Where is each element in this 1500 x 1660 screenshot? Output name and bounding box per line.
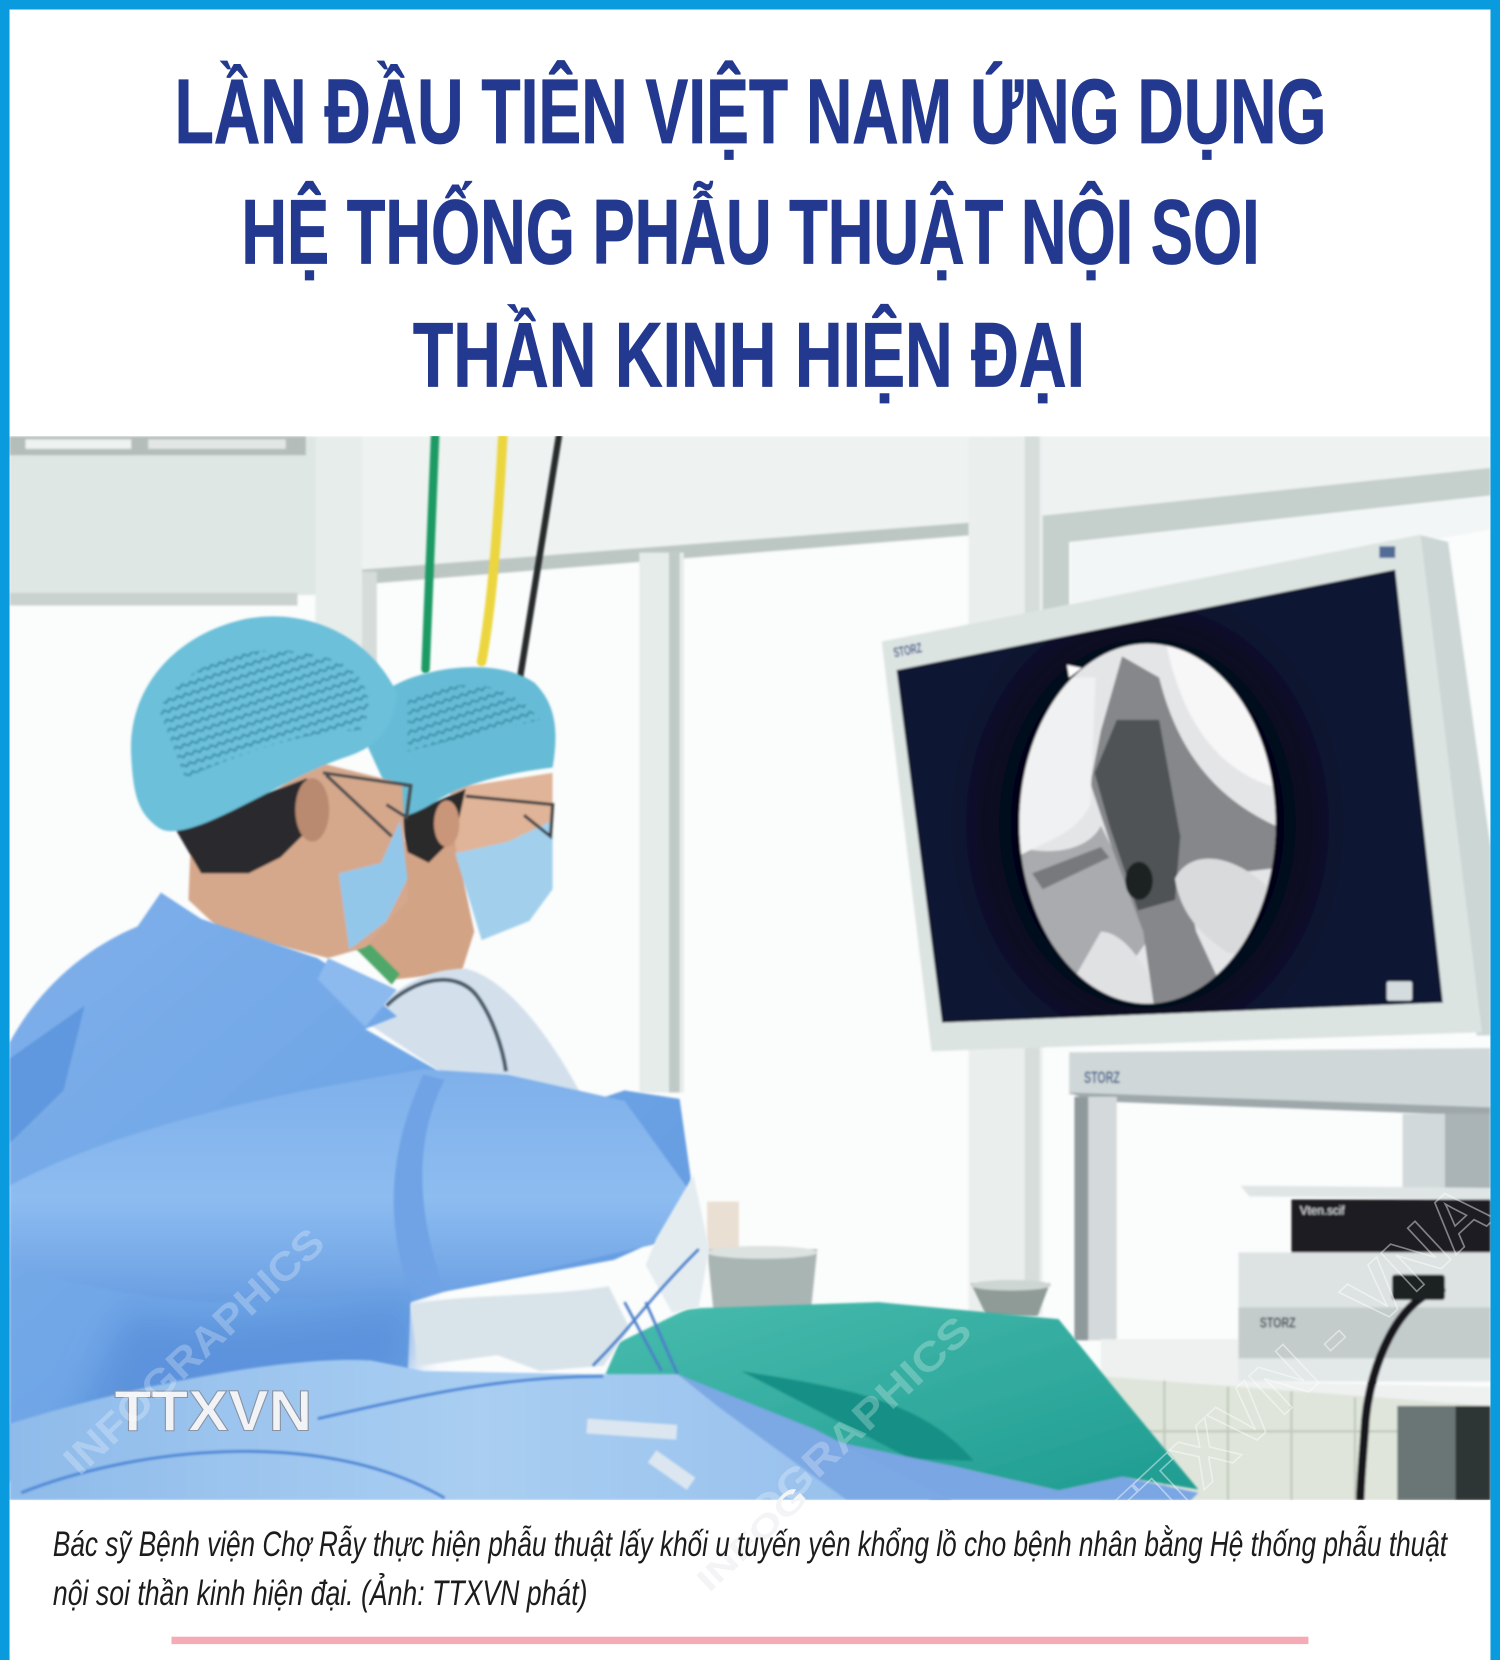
teal surgical drape bbox=[606, 1302, 1198, 1500]
surgical bowls bbox=[707, 1202, 1051, 1316]
patient drape bbox=[10, 1249, 953, 1500]
green scrub collar bbox=[355, 944, 400, 985]
photo caption bbox=[53, 1525, 1448, 1613]
endoscopy monitor bbox=[882, 535, 1490, 1051]
rear surgeon bbox=[355, 667, 555, 985]
TTXVN logo watermark: TTXVN bbox=[114, 1379, 312, 1443]
glasses bbox=[323, 773, 411, 836]
4K badge bbox=[1379, 546, 1395, 558]
surgical gown bbox=[10, 892, 693, 1482]
ear bbox=[295, 778, 329, 842]
hanging cables bbox=[426, 436, 559, 686]
plastic wrap bbox=[365, 969, 580, 1093]
TTXVN VNA watermark right: TTXVN - VNA bbox=[1086, 1167, 1500, 1569]
endoscopic view bbox=[1016, 635, 1281, 1006]
surgical mask bbox=[339, 820, 408, 950]
infographics watermark left: INFOGRAPHICS bbox=[55, 1219, 333, 1483]
device label: Vten.scif bbox=[1300, 1204, 1345, 1217]
caption line 2: nội soi thần kinh hiện đại. (Ảnh: TTXVN phát) bbox=[53, 1573, 588, 1613]
title bbox=[175, 59, 1326, 406]
neck and face bbox=[188, 762, 408, 958]
face bbox=[450, 773, 553, 863]
surgeon gloves bbox=[411, 1175, 709, 1371]
front surgeon head bbox=[131, 616, 411, 958]
infographics watermark center: INFOGRAPHICS bbox=[683, 1307, 980, 1589]
hair cap bbox=[131, 616, 397, 831]
photo: surgeons and endoscopy monitor bbox=[10, 436, 1500, 1589]
cart brand: STORZ bbox=[1084, 1068, 1120, 1087]
title line 3: THẦN KINH HIỆN ĐẠI bbox=[413, 303, 1085, 406]
glasses bbox=[466, 796, 553, 836]
equipment cart bbox=[1069, 1048, 1490, 1500]
operating room wall bbox=[10, 436, 1490, 1316]
caption watermark: INFOG bbox=[689, 1478, 815, 1598]
neck bbox=[360, 842, 474, 979]
hair cap bbox=[365, 667, 555, 817]
device brand: STORZ bbox=[1260, 1316, 1296, 1332]
scope pointer bbox=[1067, 665, 1082, 678]
camera icon bbox=[1387, 981, 1412, 1000]
surgical mask bbox=[455, 820, 553, 940]
hair bbox=[400, 789, 466, 863]
monitor brand: STORZ bbox=[892, 640, 923, 660]
hair bbox=[175, 778, 312, 873]
ear bbox=[434, 800, 459, 847]
pink divider bar bbox=[171, 1637, 1308, 1644]
